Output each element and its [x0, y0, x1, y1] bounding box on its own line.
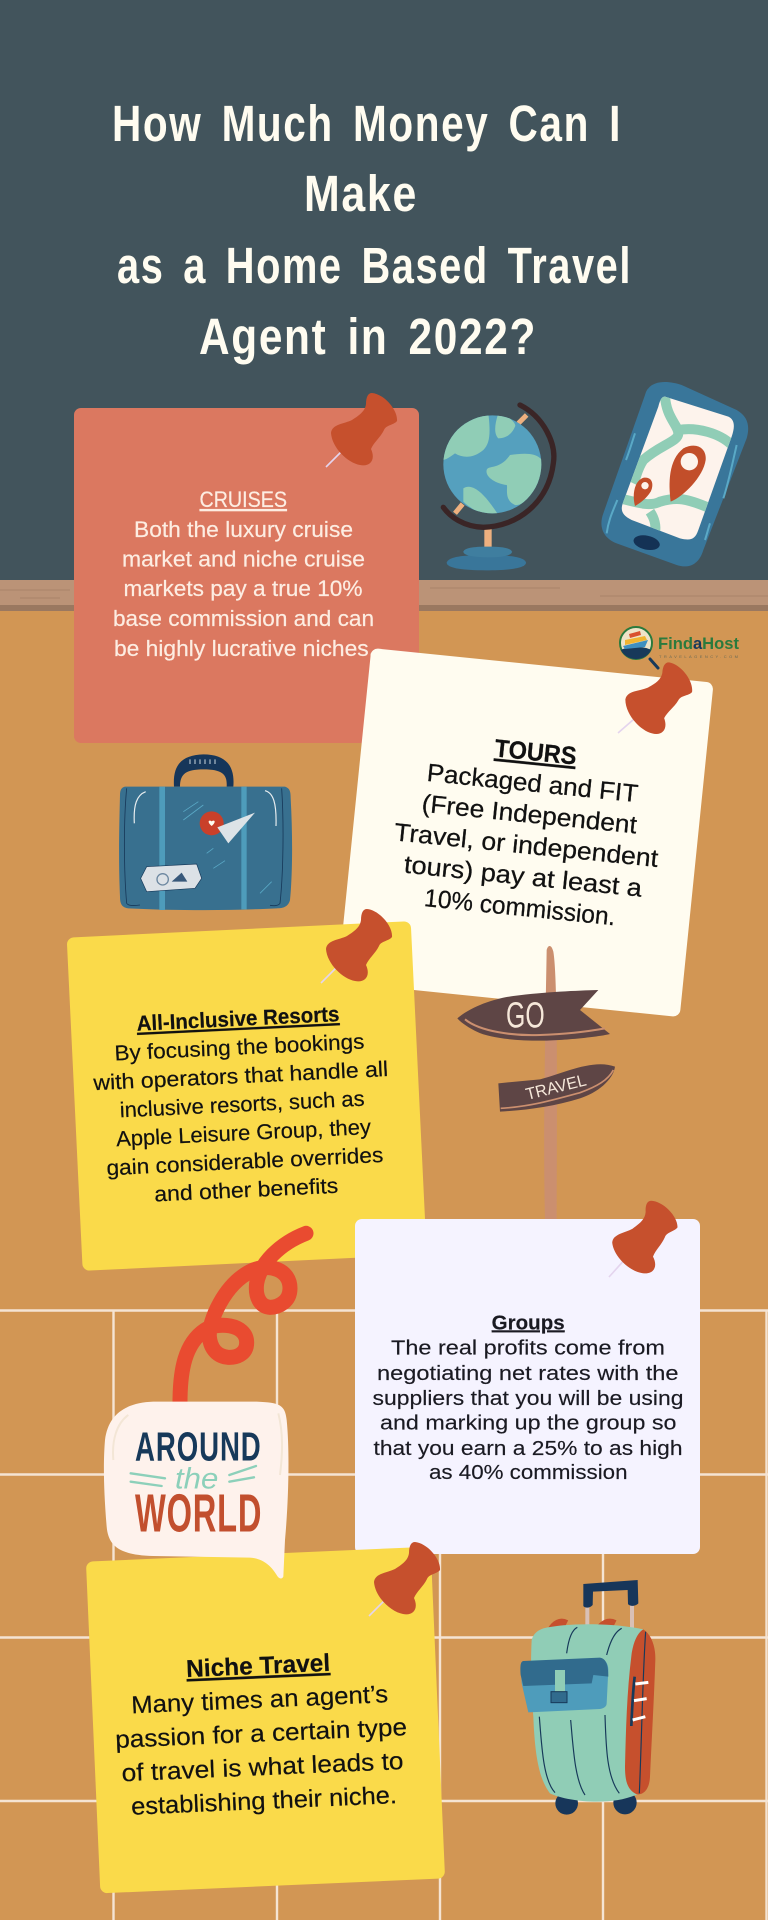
cruises text [113, 487, 375, 661]
cruises text: market and niche cruise [122, 546, 365, 572]
niche text: passion for a certain type [115, 1714, 408, 1754]
tours text: (Free Independent [420, 790, 638, 839]
logo: FindaHost: FindaHost [658, 635, 740, 653]
icon: signpost: TRAVEL [524, 1071, 588, 1104]
cruises text: base commission and can [113, 606, 374, 631]
groups text: and marking up the group so [380, 1413, 676, 1435]
logo: FindaHost [620, 627, 740, 668]
icon: around the world speech bubble: the [175, 1462, 218, 1495]
title [112, 95, 632, 365]
cruises text: CRUISES [200, 487, 287, 512]
icon: globe [442, 405, 554, 570]
title: Make [304, 165, 418, 222]
icon: around the world speech bubble: AROUND [135, 1424, 262, 1470]
all-inclusive text [89, 1000, 394, 1209]
groups text: Groups [492, 1312, 565, 1334]
cruises text: be highly lucrative niches. [114, 636, 375, 661]
icon: signpost: GO [506, 995, 545, 1036]
groups text: that you earn a 25% to as high [374, 1438, 682, 1460]
icon: signpost [457, 946, 615, 1222]
panel: niche travel [86, 1547, 445, 1893]
icon: red curl [180, 1233, 306, 1403]
title: as a Home Based Travel [117, 237, 632, 294]
icon: niche pin [369, 1542, 440, 1616]
icon: tours pin [618, 659, 694, 738]
groups text: as 40% commission [429, 1462, 628, 1484]
all-inclusive text: Apple Leisure Group, they [116, 1115, 372, 1151]
icon: phone with map [601, 382, 748, 566]
tours text: TOURS [493, 734, 578, 771]
shelf [0, 580, 768, 611]
niche text: establishing their niche. [131, 1782, 398, 1821]
icon: briefcase suitcase [119, 754, 292, 910]
niche text: of travel is what leads to [121, 1748, 404, 1787]
groups text: The real profits come from [391, 1338, 665, 1360]
cruises text: Both the luxury cruise [134, 517, 353, 542]
background: wall [0, 0, 768, 580]
all-inclusive text: inclusive resorts, such as [119, 1087, 365, 1122]
icon: all-inclusive pin [321, 909, 392, 983]
icon: around the world speech bubble [104, 1402, 288, 1578]
panel: all-inclusive resorts [67, 921, 427, 1271]
all-inclusive text: and other benefits [154, 1174, 339, 1207]
icon: groups pin [605, 1199, 680, 1277]
tours text [387, 725, 669, 935]
groups text: negotiating net rates with the [377, 1363, 678, 1385]
title: How Much Money Can I [112, 95, 622, 152]
tours text: tours) pay at least a [403, 851, 643, 903]
logo: FindaHost: TRAVELAGENCY.COM [659, 654, 738, 659]
all-inclusive text: By focusing the bookings [114, 1030, 365, 1065]
all-inclusive text: All-Inclusive Resorts [136, 1002, 340, 1036]
tours text: Packaged and FIT [426, 759, 639, 808]
panel: cruises [74, 408, 419, 743]
all-inclusive text: gain considerable overrides [106, 1143, 384, 1180]
tours text: 10% commission. [423, 884, 617, 931]
niche text [112, 1647, 411, 1821]
icon: around the world speech bubble: WORLD [135, 1485, 262, 1544]
groups text: suppliers that you will be using [372, 1388, 684, 1410]
niche text: Niche Travel [186, 1650, 331, 1683]
tours text: Travel, or independent [393, 818, 659, 873]
icon: rolling luggage [520, 1580, 655, 1815]
icon: cruises pin [326, 393, 397, 467]
groups text [372, 1312, 684, 1484]
background: floor [0, 611, 768, 1920]
title: Agent in 2022? [199, 308, 537, 365]
all-inclusive text: with operators that handle all [92, 1057, 389, 1095]
cruises text: markets pay a true 10% [124, 576, 362, 601]
panel: tours [337, 648, 714, 1017]
niche text: Many times an agent’s [131, 1681, 389, 1719]
panel: groups [355, 1219, 700, 1554]
